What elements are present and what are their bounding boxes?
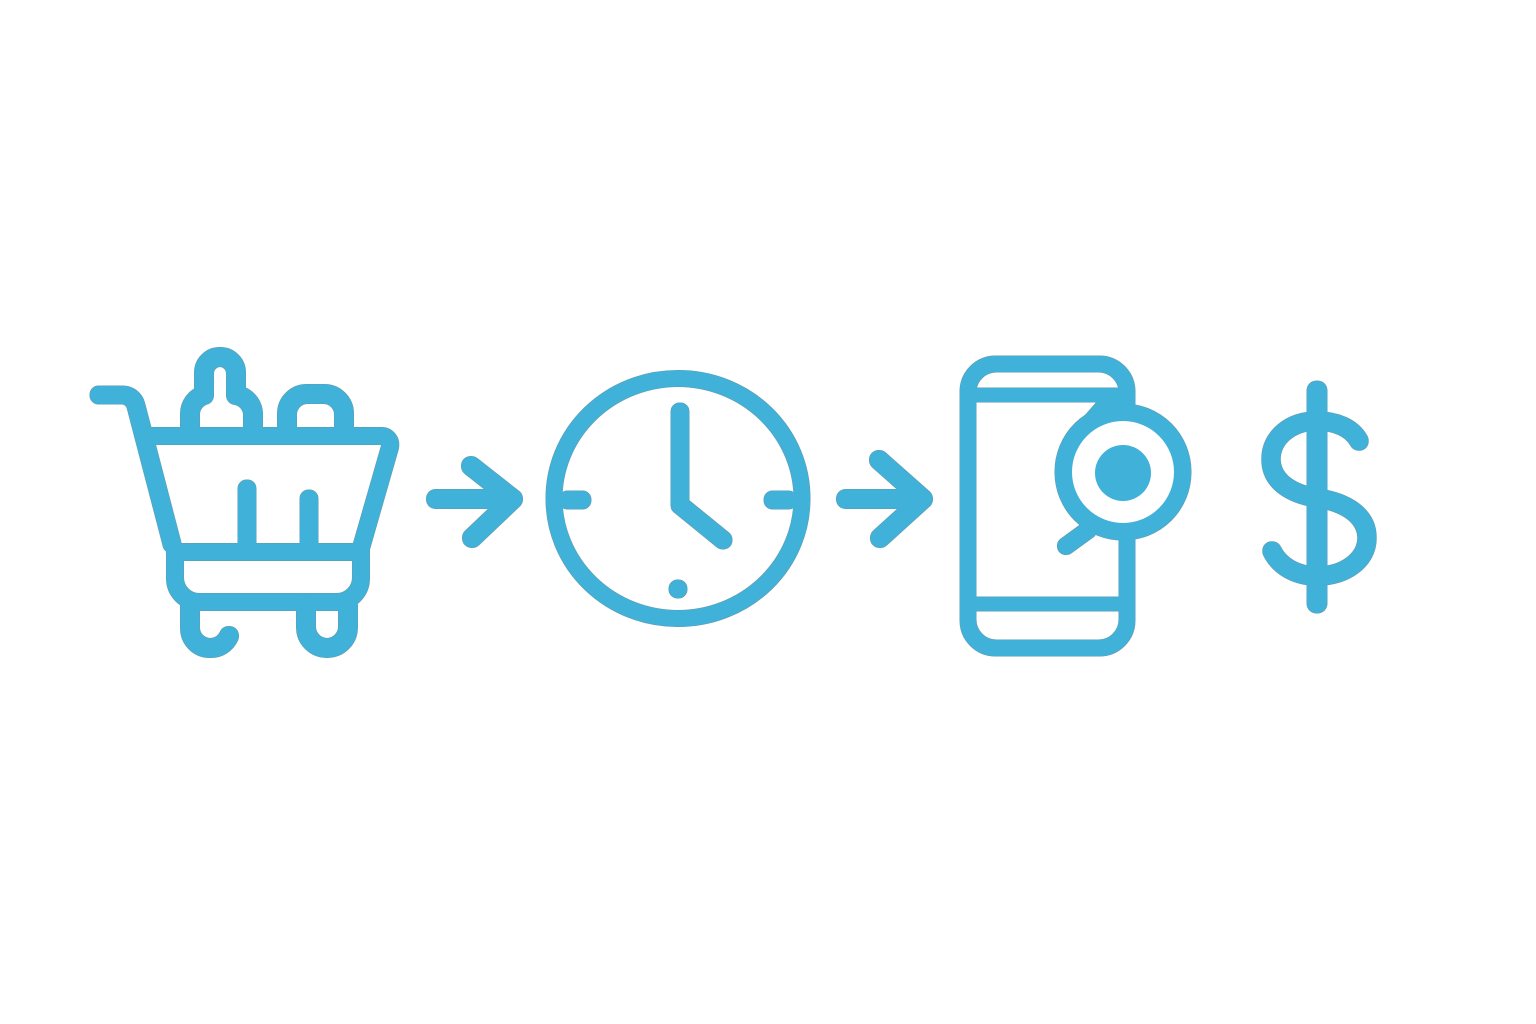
arrow: clock to phone (846, 460, 923, 538)
clock hands (680, 412, 723, 540)
right cart wheel (306, 606, 348, 648)
icon: shopping cart (99, 357, 390, 648)
wedge joining the lens to the top bar (1085, 401, 1130, 418)
dollar S curve (1271, 421, 1367, 576)
magnifier handle (1066, 530, 1088, 546)
icon: dollar sign (1271, 391, 1367, 603)
clock face ring (554, 378, 802, 618)
box in cart (287, 394, 344, 430)
icon: clock (554, 378, 802, 618)
phone body (968, 364, 1127, 648)
phone top and bottom bars (968, 395, 1127, 604)
icon: phone with magnifier (968, 364, 1182, 648)
left cart wheel (190, 606, 229, 648)
bottle in cart (190, 357, 253, 430)
basket divider bars (247, 489, 309, 548)
cart basket and lower frame (152, 436, 390, 602)
magnifier center dot (1095, 445, 1151, 501)
arrow: cart to clock (436, 466, 513, 538)
bottom dot (669, 580, 687, 598)
dollar vertical stroke (1307, 391, 1327, 603)
cart handle and left side (99, 395, 172, 544)
hour ticks (568, 491, 788, 509)
magnifier lens (1064, 412, 1182, 532)
